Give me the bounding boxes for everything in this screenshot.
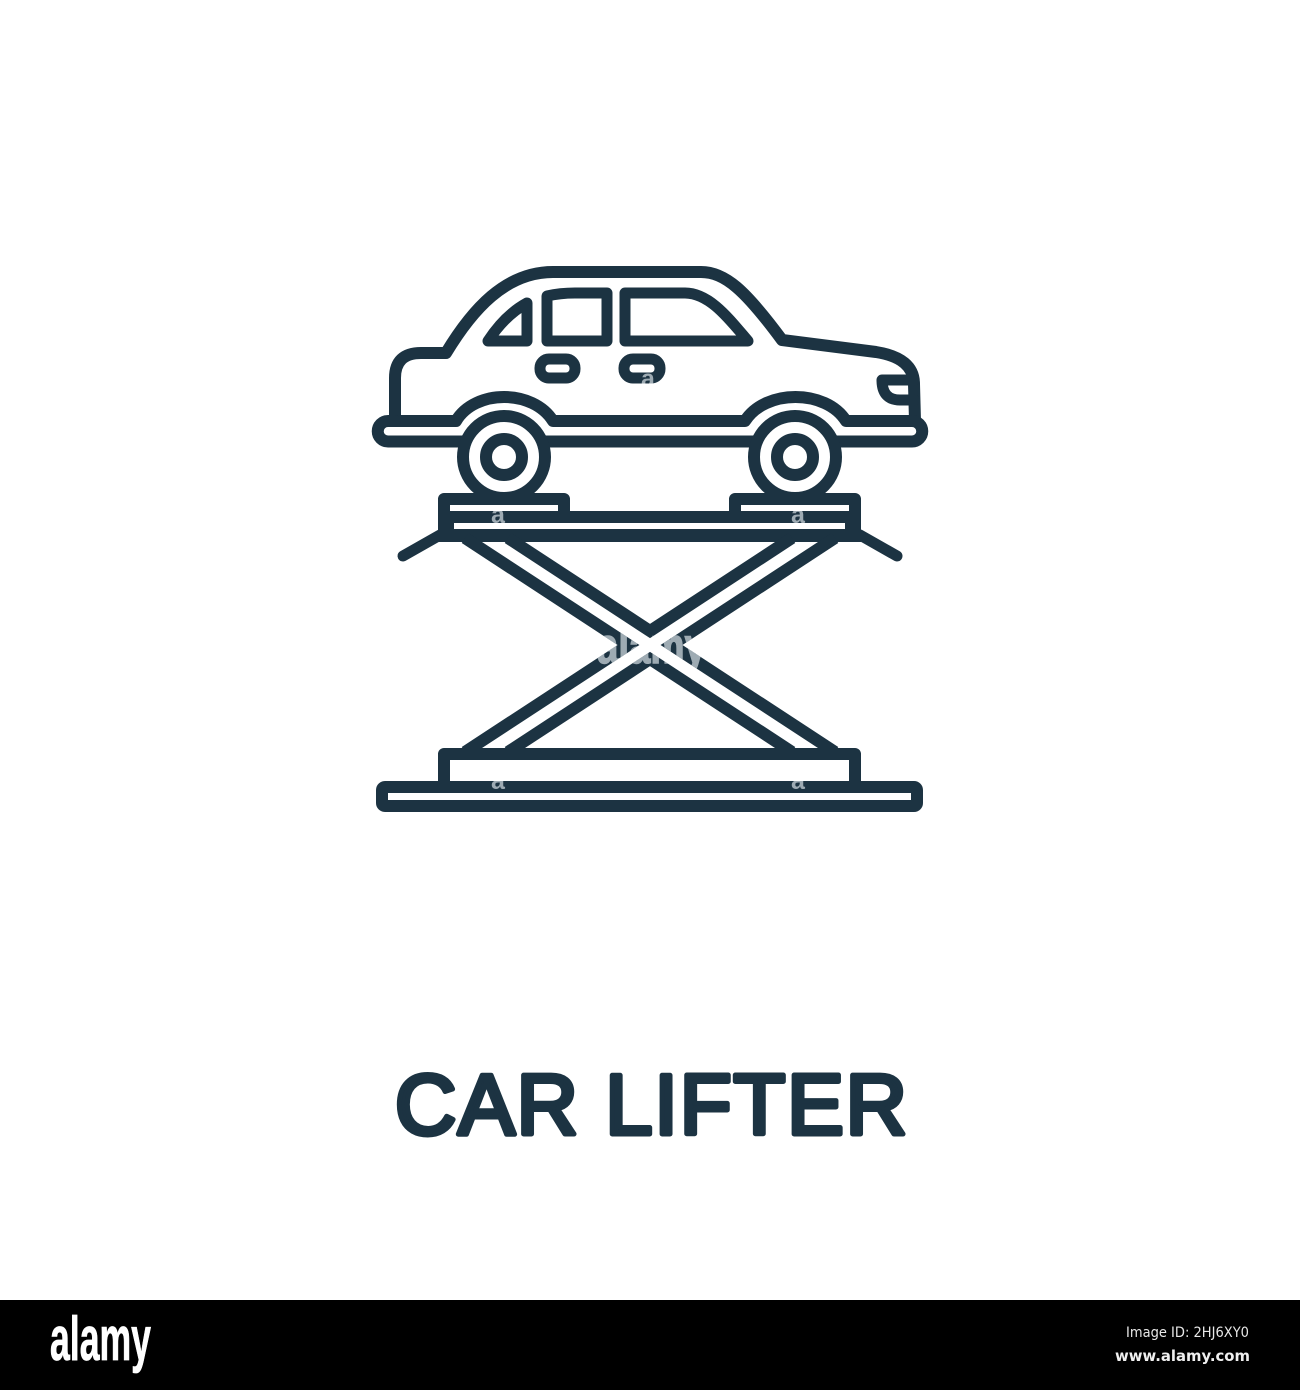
- watermark letters: a: [491, 767, 506, 795]
- watermark letters: a: [641, 365, 656, 393]
- footer band: [0, 1300, 1300, 1390]
- middle window: [547, 293, 607, 341]
- left wheel pad: [444, 499, 564, 517]
- front quarter window: [488, 303, 527, 341]
- image id: Image ID: 2HJ6XY0: [1126, 1325, 1249, 1341]
- left wheel: [463, 416, 545, 498]
- alamy logo: alamy: [50, 1305, 151, 1374]
- car body outline: [395, 272, 915, 421]
- icon: car on scissor lift: [378, 272, 922, 806]
- lift floor bar: [382, 787, 917, 806]
- left support wing: [403, 535, 440, 556]
- title: CAR LIFTER: [395, 1058, 907, 1153]
- right support wing: [860, 535, 897, 556]
- lift runway bar: [378, 421, 922, 442]
- rear window: [625, 293, 748, 341]
- watermark letters: a: [791, 501, 806, 529]
- right wheel pad: [735, 499, 855, 517]
- website: www.alamy.com: [1115, 1347, 1250, 1365]
- lift top plate: [438, 511, 861, 542]
- headlight: [882, 380, 914, 400]
- right wheel: [754, 416, 836, 498]
- watermark letters: [491, 365, 806, 795]
- scissor arms: [465, 538, 835, 752]
- door handle right: [624, 359, 660, 378]
- watermark letters: a: [791, 767, 806, 795]
- watermark letters: alamy: [597, 618, 706, 674]
- lift base pedestal: [444, 754, 855, 787]
- watermark letters: a: [491, 501, 506, 529]
- door handle left: [540, 359, 575, 378]
